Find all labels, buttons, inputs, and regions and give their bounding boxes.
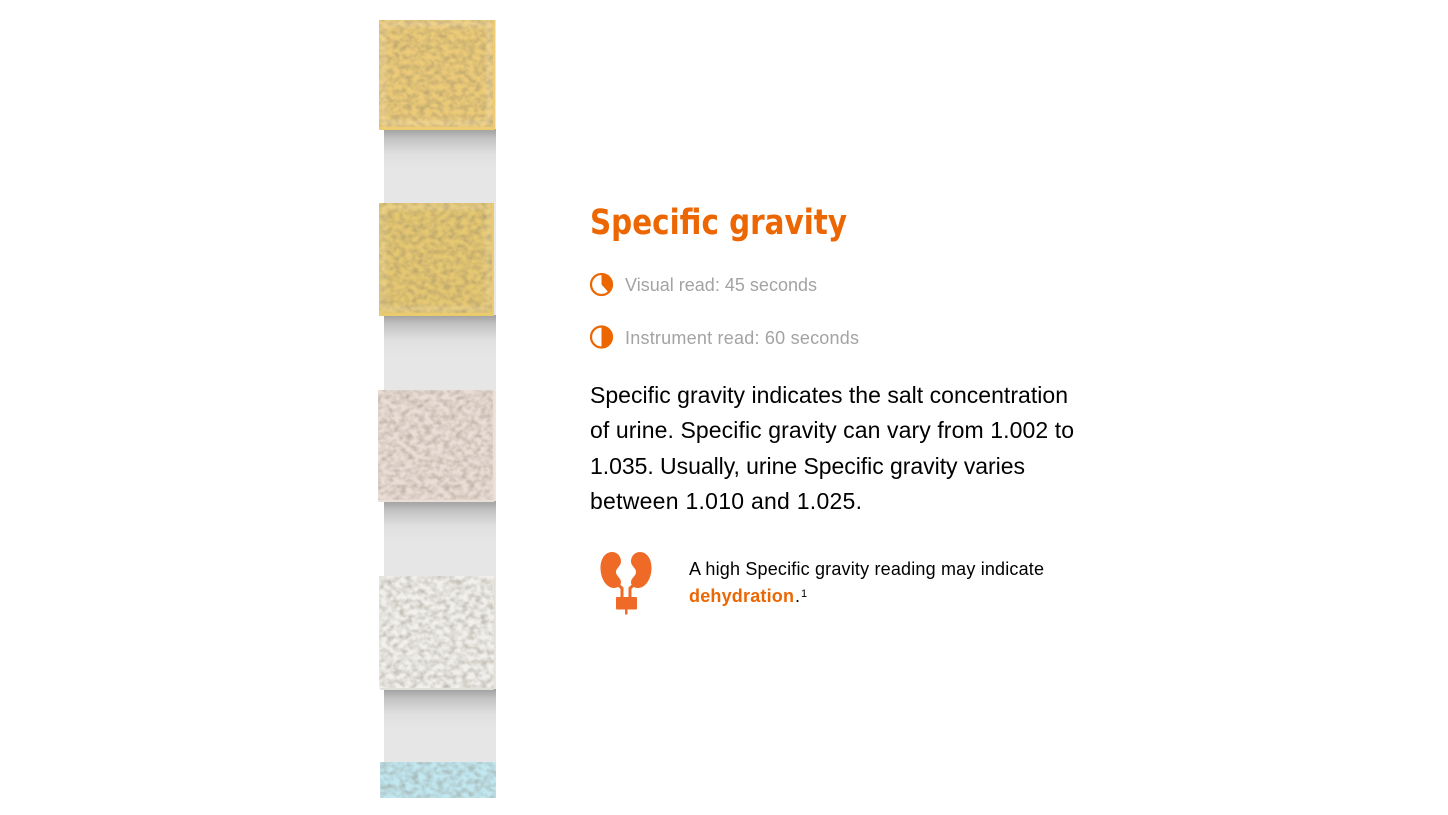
pad 5: light blue [380,762,496,798]
pad 3: beige [378,390,495,502]
high reading note: 1 [801,588,807,600]
strip backing [384,20,496,798]
pad 1: yellow [379,20,495,130]
body text: 1.035. Usually, urine Specific gravity varies [590,453,1025,479]
icon: visual read timer [591,274,612,295]
high reading note [689,559,1044,606]
high reading note: A high Specific gravity reading may indicate [689,559,1044,579]
test strip [378,20,496,798]
high reading note: . [795,586,800,606]
icon: kidneys and bladder [600,552,652,614]
pad 2: mustard yellow [379,203,494,316]
instrument read time: Instrument read: 60 seconds [625,328,859,348]
title: Specific gravity [590,203,847,243]
body text: of urine. Specific gravity can vary from 1.002 to [590,417,1074,443]
body text: between 1.010 and 1.025. [590,488,862,514]
visual read time: Visual read: 45 seconds [625,275,817,295]
icon: instrument read timer [591,326,612,348]
pad shadows [384,129,496,731]
pad 4: off-white [379,576,495,690]
high reading note: dehydration [689,586,794,606]
body text: Specific gravity indicates the salt concentration [590,382,1068,408]
body text [590,382,1074,514]
